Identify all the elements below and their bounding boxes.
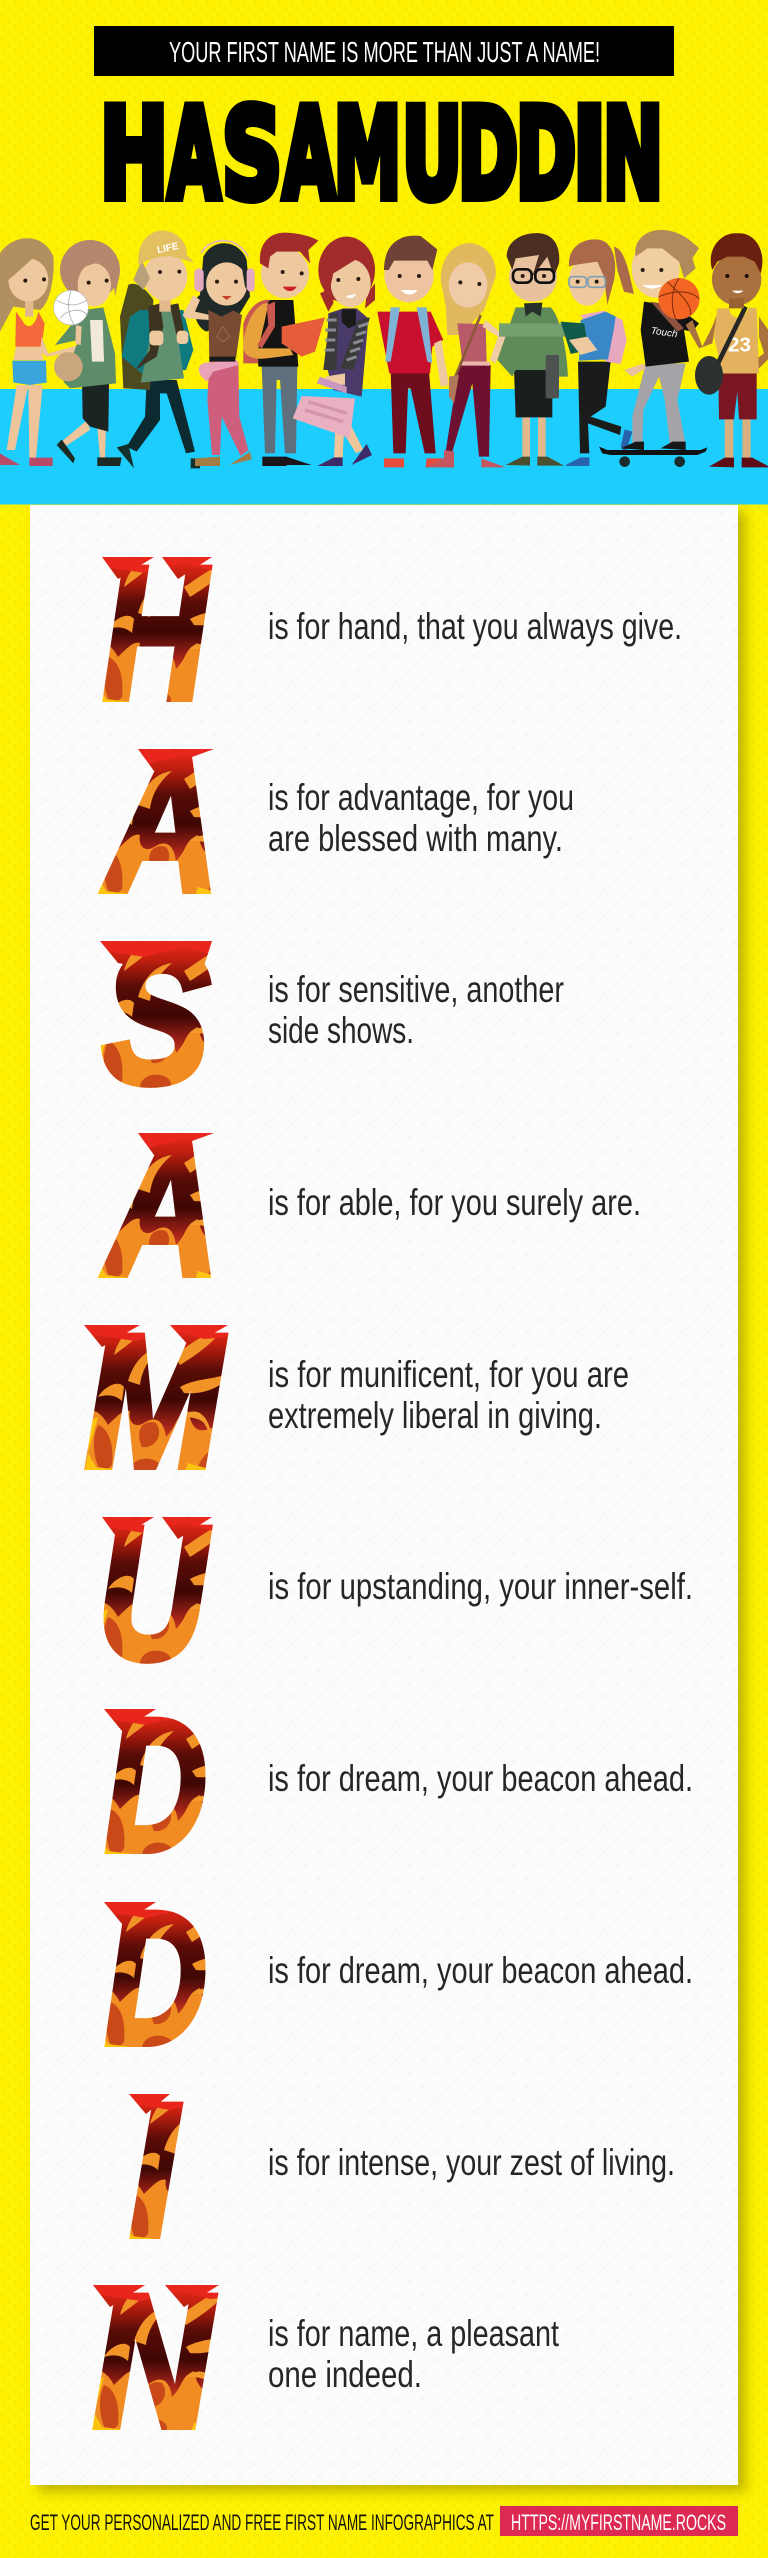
title: name: A [168, 83, 220, 227]
person 6: girl with pink bag [293, 237, 375, 466]
letter A: A [103, 720, 218, 930]
person 11: skater with basketball: Touch [650, 326, 679, 340]
letter D: D [106, 1680, 206, 1890]
description S: side shows. [268, 1010, 414, 1051]
description N [268, 2313, 560, 2395]
description M: extremely liberal in giving. [268, 1395, 602, 1436]
description A [268, 777, 574, 859]
skateboard [599, 447, 707, 455]
row: letter U [98, 1488, 693, 1698]
letter S: S [102, 912, 210, 1122]
title: name: D [516, 83, 576, 227]
title: name: H [100, 83, 168, 227]
title: name: A [283, 83, 335, 227]
row: letter H [102, 528, 682, 738]
letter U: U [98, 1488, 209, 1698]
blue floor band [0, 389, 768, 504]
description A: is for able, for you surely are. [268, 1182, 641, 1223]
top banner [94, 26, 674, 76]
description S [268, 969, 564, 1051]
person 3: boy with cap and backpack [117, 231, 200, 468]
row: letter A [103, 1104, 641, 1314]
white panel [30, 505, 746, 2492]
description M: is for munificent, for you are [268, 1354, 629, 1395]
row: letter D [104, 1680, 693, 1890]
person 3: boy with cap and backpack: LIFE [156, 241, 180, 256]
person 9: boy with glasses [497, 233, 568, 466]
description M [268, 1354, 629, 1436]
row: letter A [103, 720, 574, 930]
person 12: curly-haired boy in tank top [686, 233, 768, 467]
letter H: H [104, 528, 209, 738]
title: name: N [603, 83, 663, 227]
title: name: S [222, 83, 282, 227]
description A: is for advantage, for you [268, 777, 574, 818]
row: letter I [129, 2065, 675, 2275]
description A: are blessed with many. [268, 818, 563, 859]
letter M: M [86, 1296, 224, 1506]
illustration: group of students, left half [0, 231, 375, 468]
person 4: girl with headphones [183, 241, 255, 466]
row: letter N [93, 2256, 560, 2466]
title: name [100, 83, 663, 227]
title: name: M [334, 83, 401, 227]
person 1: girl in orange top [0, 238, 79, 466]
person 8: blonde girl [426, 243, 506, 467]
letter A: A [103, 1104, 218, 1314]
letter D: D [106, 1873, 206, 2083]
description S: is for sensitive, another [268, 969, 564, 1010]
person 7: boy in red shirt [377, 236, 453, 467]
illustration: group of students, right half [377, 230, 768, 467]
letter N: N [94, 2256, 214, 2466]
title: name: D [458, 83, 518, 227]
person 2: girl with volleyball [54, 240, 122, 466]
row: letter S [100, 912, 564, 1122]
person 11: skater with basketball [599, 230, 707, 467]
title: name: U [402, 83, 462, 227]
footer call to action: GET YOUR PERSONALIZED AND FREE FIRST NAME INFOGRAPHICS AT [30, 2510, 494, 2535]
description N: one indeed. [268, 2354, 422, 2395]
row: letter M [84, 1296, 629, 1506]
person 5: boy with book [243, 233, 325, 466]
person 10: girl with ponytail and tablet [561, 239, 634, 466]
row: letter D [104, 1873, 693, 2083]
person 12: curly-haired boy in tank top: 23 [728, 334, 751, 357]
letter I: I [130, 2065, 180, 2275]
title: name: I [573, 83, 606, 227]
description N: is for name, a pleasant [268, 2313, 560, 2354]
